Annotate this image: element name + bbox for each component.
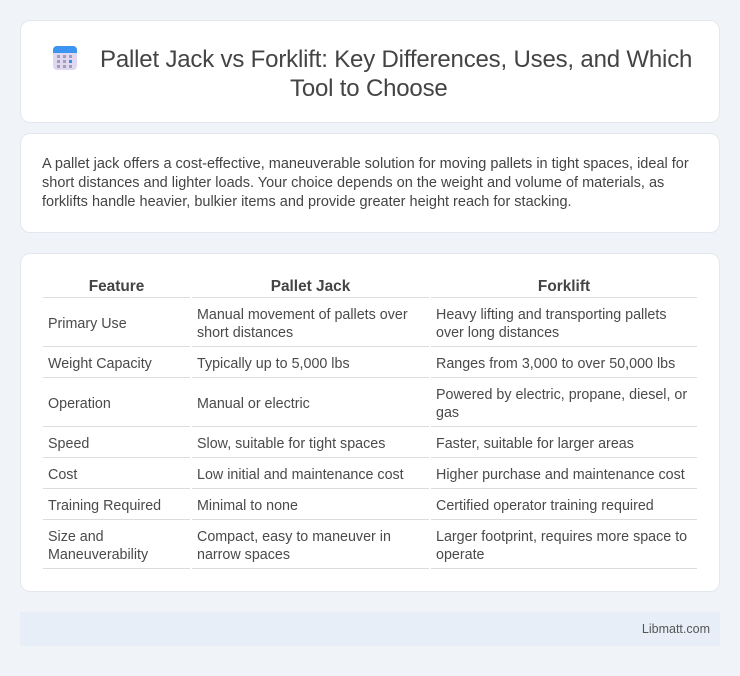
text: narrow spaces xyxy=(197,547,290,563)
row: Weight Capacity: Weight Capacity xyxy=(48,356,152,372)
text: Faster, suitable for larger areas xyxy=(436,436,634,452)
intro text panel xyxy=(20,133,720,233)
footer credit: Libmatt.com xyxy=(642,622,710,636)
title xyxy=(100,46,692,102)
text: Ranges from 3,000 to over 50,000 lbs xyxy=(436,356,675,372)
text: Heavy lifting and transporting pallets xyxy=(436,307,666,323)
header: Pallet Jack: Pallet Jack xyxy=(271,278,350,295)
title: Tool to Choose xyxy=(290,75,448,102)
text: Compact, easy to maneuver in xyxy=(197,529,391,545)
text: operate xyxy=(436,547,484,563)
row: Speed: Speed xyxy=(48,436,89,452)
footer bar xyxy=(20,612,720,646)
row: Primary Use: Primary Use xyxy=(48,316,127,332)
row: Size and Maneuverability xyxy=(48,529,148,563)
text: gas xyxy=(436,405,459,421)
intro paragraph: short distances and lighter loads. Your choice depends on the weight and volume of materials, as xyxy=(42,175,664,191)
text: Certified operator training required xyxy=(436,498,654,514)
icon: calendar xyxy=(53,46,77,70)
text: Higher purchase and maintenance cost xyxy=(436,467,685,483)
text: Manual or electric xyxy=(197,396,310,412)
text: Typically up to 5,000 lbs xyxy=(197,356,350,372)
comparison table panel xyxy=(20,253,720,592)
header: Forklift: Forklift xyxy=(538,278,590,295)
row: Cost: Cost xyxy=(48,467,77,483)
text: Larger footprint, requires more space to xyxy=(436,529,687,545)
text: Powered by electric, propane, diesel, or xyxy=(436,387,687,403)
text: short distances xyxy=(197,325,293,341)
header panel xyxy=(20,20,720,123)
row: Operation: Operation xyxy=(48,396,111,412)
text: Manual movement of pallets over xyxy=(197,307,408,323)
intro paragraph: forklifts handle heavier, bulkier items and provide greater height reach for stacking. xyxy=(42,194,572,210)
row: Training Required: Training Required xyxy=(48,498,161,514)
title: Pallet Jack vs Forklift: Key Differences, Uses, and Which xyxy=(100,46,692,73)
text: Slow, suitable for tight spaces xyxy=(197,436,385,452)
intro paragraph xyxy=(42,156,689,210)
row: Size and Maneuverability: Maneuverability xyxy=(48,547,148,563)
text: over long distances xyxy=(436,325,559,341)
header: Feature: Feature xyxy=(89,278,144,295)
text: Low initial and maintenance cost xyxy=(197,467,404,483)
row: Size and Maneuverability: Size and xyxy=(48,529,104,545)
intro paragraph: A pallet jack offers a cost-effective, maneuverable solution for moving pallets in tight spaces, ideal for xyxy=(42,156,689,172)
text: Minimal to none xyxy=(197,498,298,514)
